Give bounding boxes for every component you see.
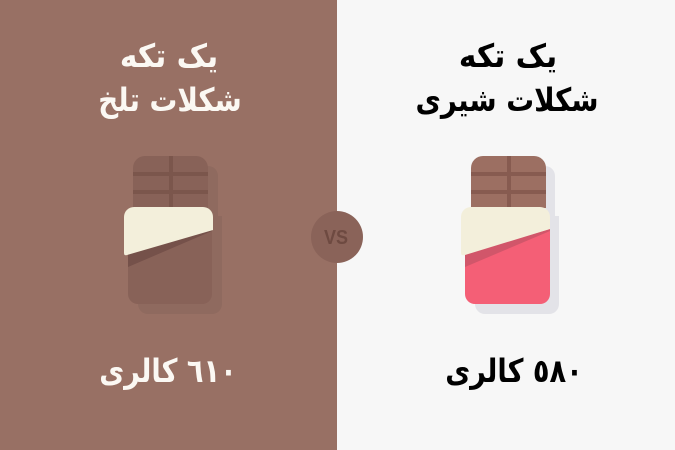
- heading: milk chocolate: [415, 38, 599, 120]
- calories: dark chocolate: ٦١٠ کالری: [99, 353, 237, 391]
- heading: milk chocolate: یک تکه: [459, 38, 557, 75]
- icon: dark chocolate bar: [124, 156, 222, 314]
- icon: milk chocolate bar: [461, 156, 559, 314]
- calories: milk chocolate: ٥٨٠ کالری: [445, 353, 583, 391]
- badge: VS: VS: [324, 227, 348, 249]
- heading: dark chocolate: [98, 38, 242, 120]
- badge: VS: [311, 211, 363, 263]
- heading: dark chocolate: شکلات تلخ: [98, 82, 242, 120]
- panel: milk chocolate background: [337, 0, 675, 450]
- panel: dark chocolate background: [0, 0, 337, 450]
- heading: milk chocolate: شکلات شیری: [415, 82, 599, 120]
- heading: dark chocolate: یک تکه: [120, 38, 218, 75]
